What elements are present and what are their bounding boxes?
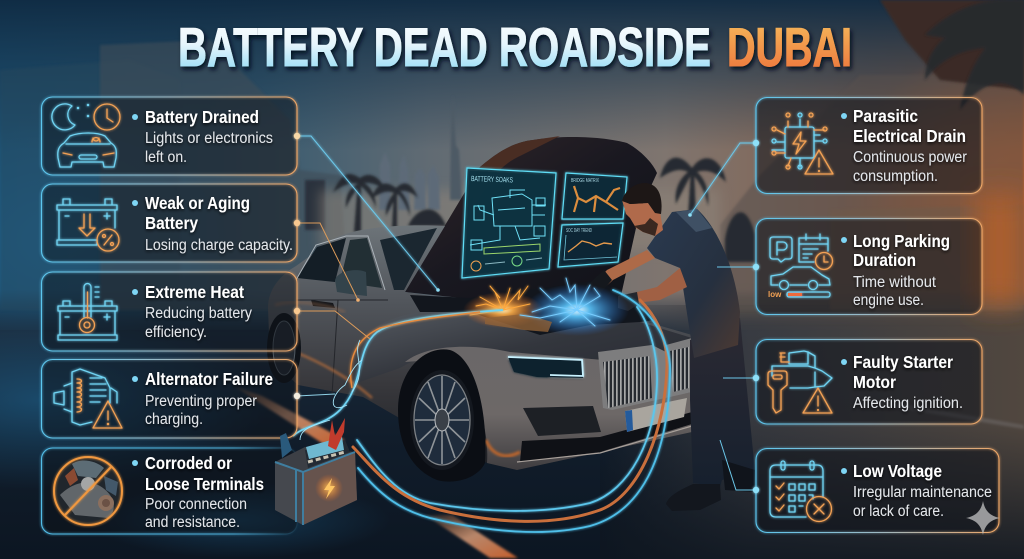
text: faulty starter motor: Affecting ignition. — [853, 395, 963, 412]
boots — [666, 484, 721, 511]
hologram panels — [462, 168, 627, 278]
panel: corroded or loose terminals — [42, 448, 297, 534]
left buildings — [0, 60, 180, 310]
text: extreme heat: Extreme Heat — [145, 282, 244, 302]
bullet — [841, 359, 847, 365]
text: parasitic electrical drain: Electrical Drain — [853, 126, 966, 146]
text: long parking duration: Long Parking — [853, 231, 950, 251]
bullet — [132, 200, 138, 206]
rear wheel — [267, 313, 301, 383]
palms — [333, 0, 1024, 262]
panel: parasitic electrical drain — [753, 98, 982, 194]
panel: weak or aging battery — [42, 184, 300, 262]
title: BATTERY DEAD ROADSIDE — [178, 16, 711, 78]
text: parasitic electrical drain: Continuous power — [853, 149, 967, 166]
side windows — [297, 238, 346, 282]
clamps — [328, 418, 345, 450]
skyline — [450, 95, 462, 200]
text: long parking duration: Duration — [853, 250, 916, 270]
mirror — [335, 270, 367, 296]
text: extreme heat — [145, 282, 252, 341]
text: weak or aging battery — [145, 193, 293, 254]
icon: starter motor key warning — [768, 351, 832, 413]
text: weak or aging battery: Weak or Aging — [145, 193, 250, 213]
text: extreme heat: efficiency. — [145, 324, 207, 341]
panel: faulty starter motor — [753, 340, 982, 424]
portable jump starter — [275, 418, 357, 525]
hologram: battery schematic: BATTERY SOAKS — [471, 174, 513, 184]
arc to battery pack: blue — [293, 310, 503, 436]
icon: corroded terminal prohibited — [54, 457, 122, 525]
text: parasitic electrical drain — [853, 106, 967, 185]
text: long parking duration — [853, 231, 950, 309]
bolt — [315, 474, 343, 502]
text: low voltage: Low Voltage — [853, 461, 942, 481]
text: corroded or loose terminals: Loose Terminals — [145, 474, 264, 494]
bumper edge — [517, 426, 692, 462]
bullet — [132, 114, 138, 120]
grille — [598, 338, 692, 410]
front wheel — [398, 349, 485, 482]
bullet — [841, 113, 847, 119]
text: corroded or loose terminals — [145, 453, 264, 531]
text: long parking duration: engine use. — [853, 292, 924, 309]
legs — [690, 318, 755, 487]
text: battery drained: Battery Drained — [145, 107, 259, 127]
torso — [647, 209, 740, 358]
icon: parking calendar car — [770, 234, 832, 297]
connector lines — [297, 136, 756, 490]
door lines and reflections — [296, 300, 388, 395]
text: alternator failure: Preventing proper — [145, 393, 257, 410]
text: low voltage: or lack of care. — [853, 503, 944, 520]
blue spark burst — [525, 284, 629, 336]
panel: long parking duration — [753, 218, 982, 314]
panel: extreme heat — [42, 272, 300, 351]
battery module — [485, 314, 552, 332]
text: battery drained — [145, 107, 273, 166]
icon: calendar cancel — [770, 461, 832, 522]
text: low voltage — [853, 461, 992, 520]
hologram: wiring matrix: BRIDGE MATRIX — [571, 178, 599, 184]
text: battery drained: Lights or electronics — [145, 130, 273, 147]
bullet — [841, 468, 847, 474]
bullet — [132, 289, 138, 295]
orange spark burst — [463, 292, 543, 328]
hologram: wiring matrix — [562, 173, 627, 219]
car body — [268, 225, 692, 470]
door handle — [311, 300, 335, 308]
bullet — [132, 376, 138, 382]
text: alternator failure: Alternator Failure — [145, 369, 273, 389]
bullet — [841, 237, 847, 243]
hologram: battery schematic — [462, 168, 556, 278]
car — [267, 136, 692, 482]
text: corroded or loose terminals: Poor connection — [145, 496, 247, 513]
icon: battery percent — [57, 199, 119, 251]
gloves — [585, 270, 612, 302]
text: faulty starter motor: Faulty Starter — [853, 352, 953, 372]
text: corroded or loose terminals: and resistance. — [145, 514, 240, 531]
head — [622, 200, 663, 236]
text: faulty starter motor — [853, 352, 963, 412]
panel: low voltage — [753, 448, 999, 532]
horizon — [320, 190, 720, 250]
headlight — [508, 357, 583, 378]
text: extreme heat: Reducing battery — [145, 305, 252, 322]
jump cables — [353, 290, 670, 532]
icon: chip warning — [772, 113, 833, 174]
number plate — [625, 398, 687, 432]
title: DUBAI — [727, 16, 852, 78]
text: weak or aging battery: Losing charge capacity. — [145, 237, 293, 254]
panel: battery drained — [42, 97, 300, 175]
text: parasitic electrical drain: Parasitic — [853, 106, 918, 126]
open bonnet — [405, 137, 657, 300]
text: parasitic electrical drain: consumption. — [853, 168, 938, 185]
panel: alternator failure — [42, 360, 300, 438]
text: alternator failure — [145, 369, 273, 428]
hologram: trend chart — [558, 223, 623, 267]
low label: low — [768, 290, 782, 299]
engine bay — [410, 280, 655, 335]
sparks and battery arc — [293, 278, 629, 440]
icon: sparkle watermark — [966, 501, 1000, 535]
right buildings — [720, 75, 1024, 310]
text: battery drained: left on. — [145, 149, 187, 166]
text: alternator failure: charging. — [145, 411, 203, 428]
bumper intake — [523, 406, 601, 436]
windshield — [380, 228, 437, 290]
ground reflection streaks — [232, 385, 345, 445]
arms — [595, 250, 655, 292]
icon: moon clock car — [52, 104, 120, 167]
front fender — [405, 347, 692, 470]
text: corroded or loose terminals: Corroded or — [145, 453, 232, 473]
bullet — [132, 460, 138, 466]
fender orange reflection — [486, 440, 520, 456]
text: faulty starter motor: Motor — [853, 372, 896, 392]
hologram: trend chart: SOC DAY TREND — [566, 228, 592, 234]
mechanic — [585, 183, 755, 511]
hood surface — [354, 310, 692, 384]
text: weak or aging battery: Battery — [145, 213, 198, 233]
icon: alternator warning — [54, 369, 122, 428]
text: long parking duration: Time without — [853, 274, 937, 291]
text: low voltage: Irregular maintenance — [853, 484, 992, 501]
icon: battery thermometer — [58, 284, 117, 340]
